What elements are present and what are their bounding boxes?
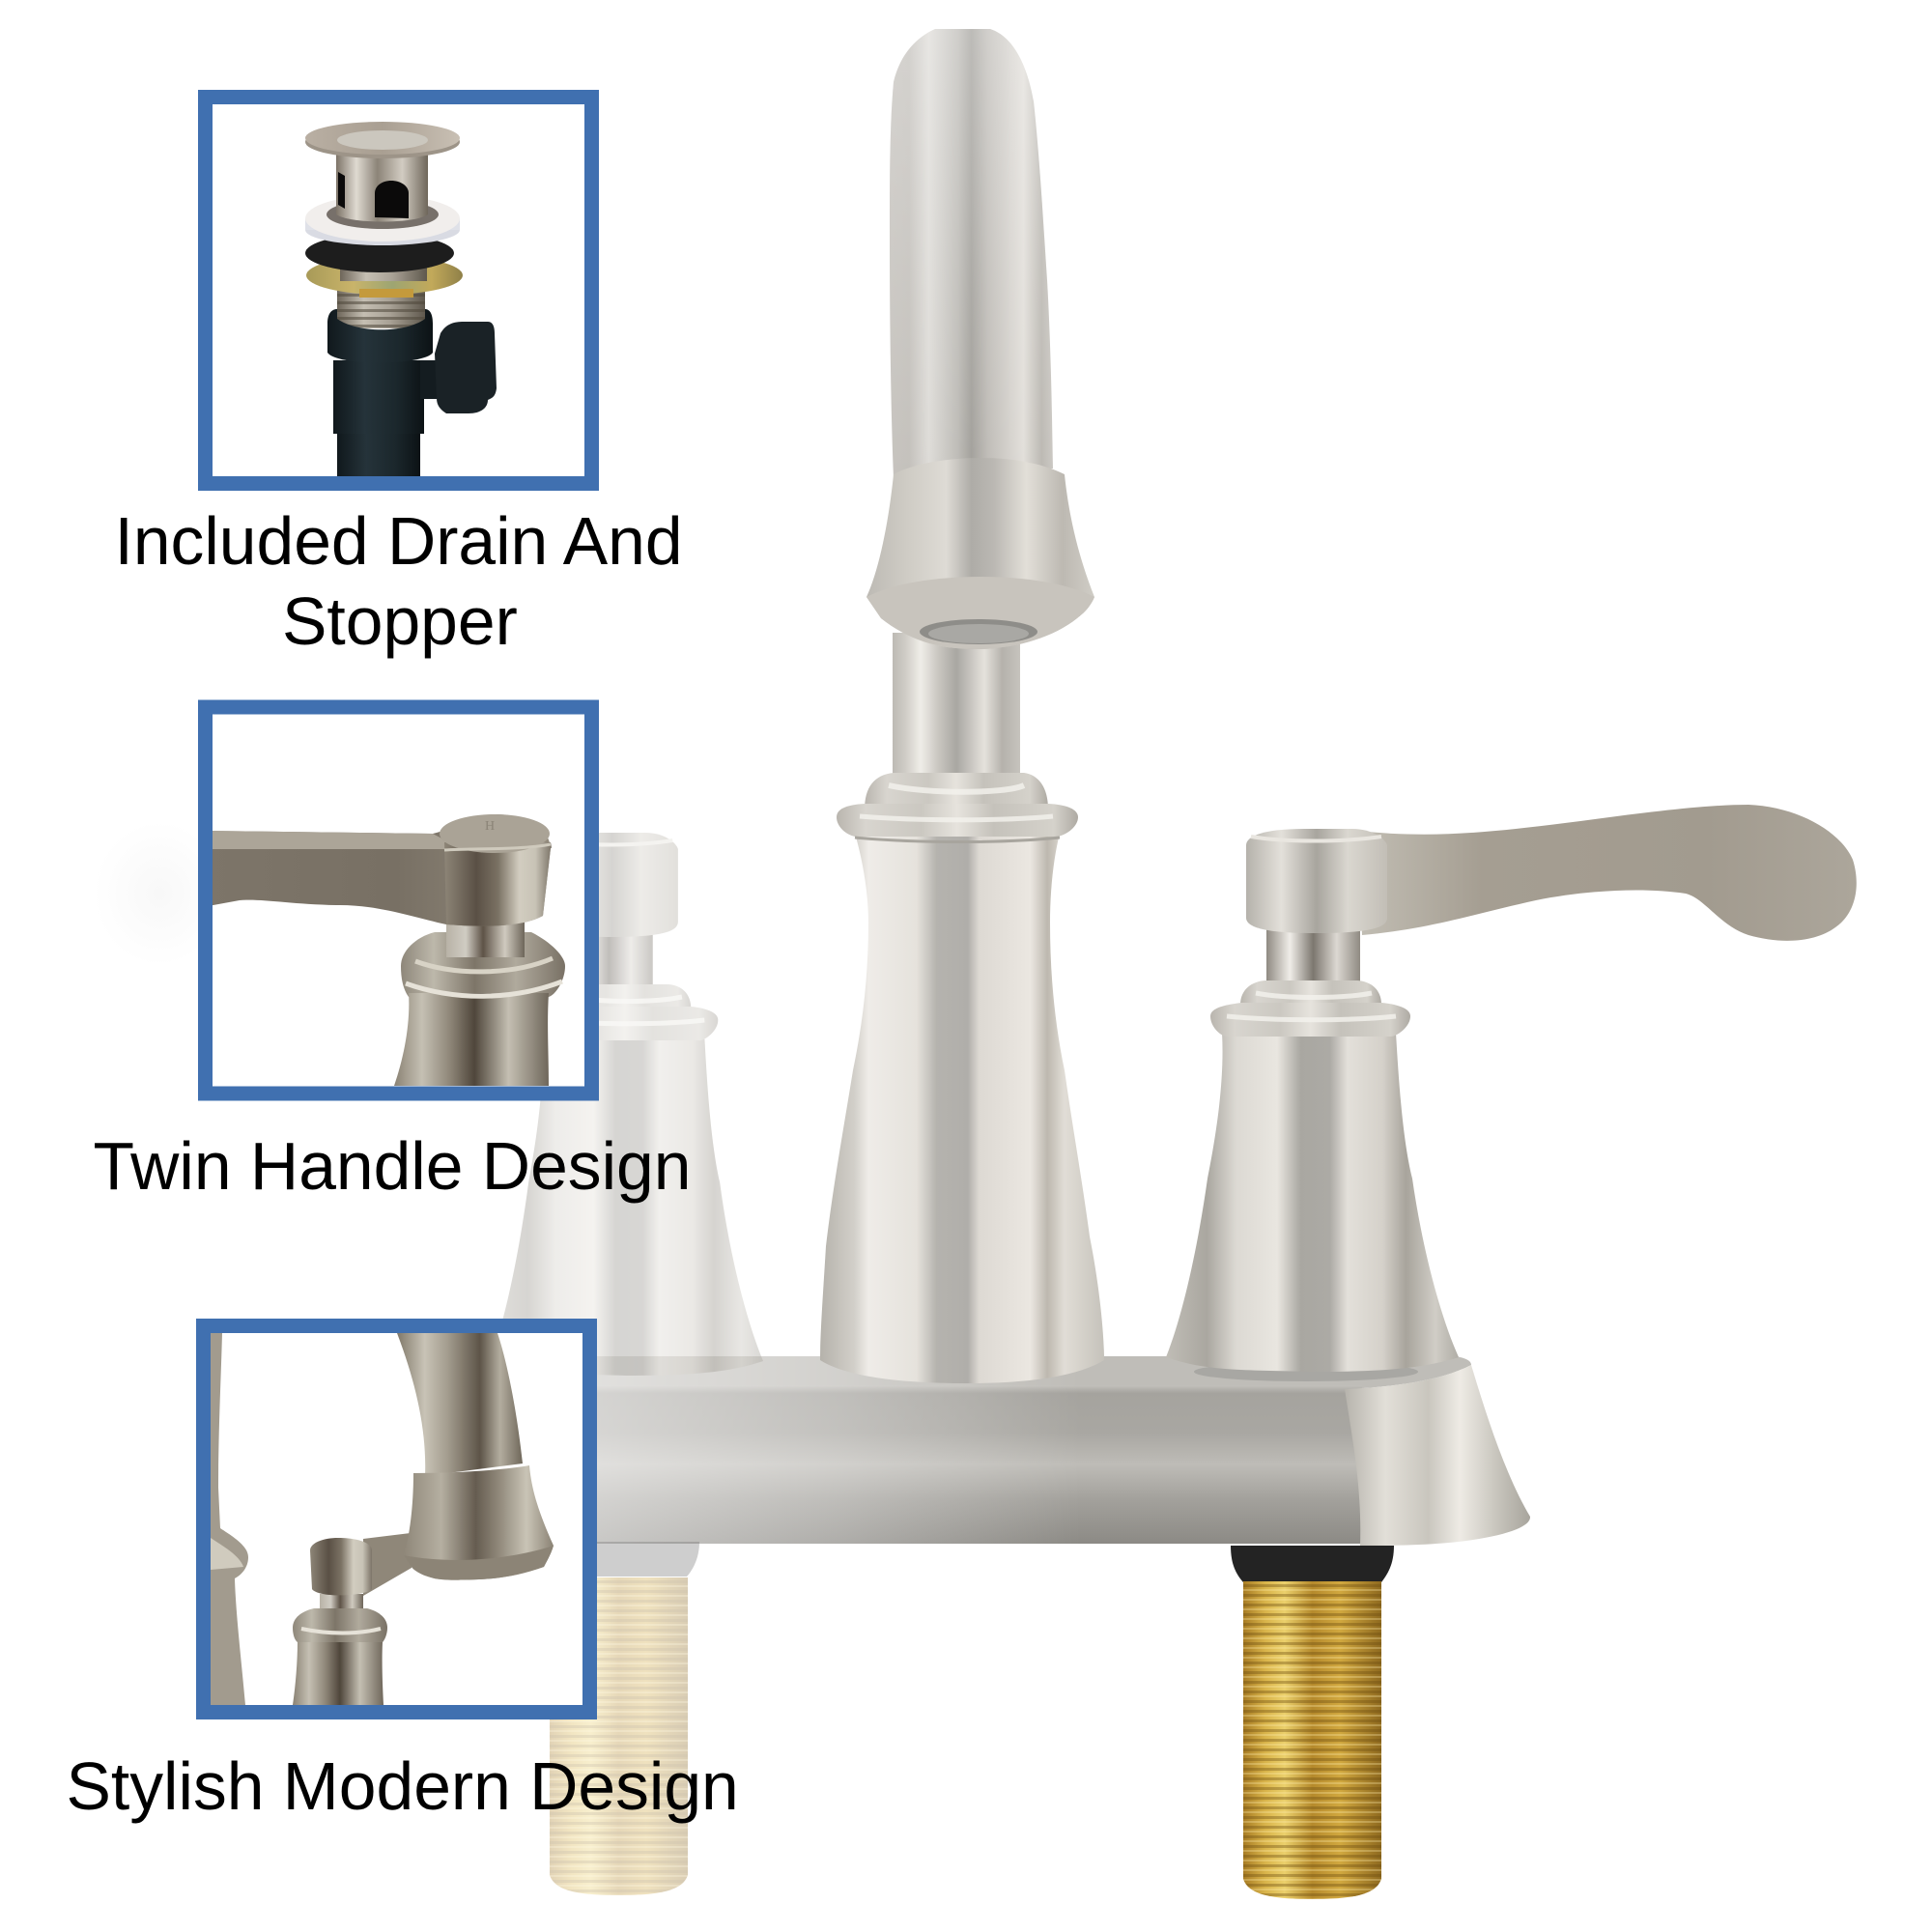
spout collar and aerator xyxy=(867,458,1094,649)
ghosted left thread xyxy=(546,1542,699,1895)
ghosted left handle xyxy=(490,833,763,1376)
central spout xyxy=(890,29,1053,478)
drain and stopper photo xyxy=(305,122,497,478)
central body xyxy=(820,773,1104,1383)
caption: drain xyxy=(114,503,683,659)
panel: stylish design xyxy=(203,1325,589,1712)
right handle xyxy=(1166,829,1459,1372)
caption: stylish design: Stylish Modern Design xyxy=(66,1748,739,1824)
caption: drain: Stopper xyxy=(282,583,518,659)
panel: drain and stopper xyxy=(205,97,591,483)
faint lever smudge xyxy=(94,821,225,966)
twin handle photo: H xyxy=(485,819,495,834)
caption: twin handle: Twin Handle Design xyxy=(93,1128,691,1204)
central stem xyxy=(893,633,1020,774)
faucet deck base xyxy=(541,1352,1530,1546)
stylish spout photo xyxy=(204,1333,554,1705)
panel: twin handle xyxy=(205,707,591,1094)
right handle lever xyxy=(1357,805,1857,941)
caption: drain: Included Drain And xyxy=(114,503,683,579)
twin handle photo xyxy=(208,814,565,1086)
right brass thread xyxy=(1231,1546,1394,1899)
